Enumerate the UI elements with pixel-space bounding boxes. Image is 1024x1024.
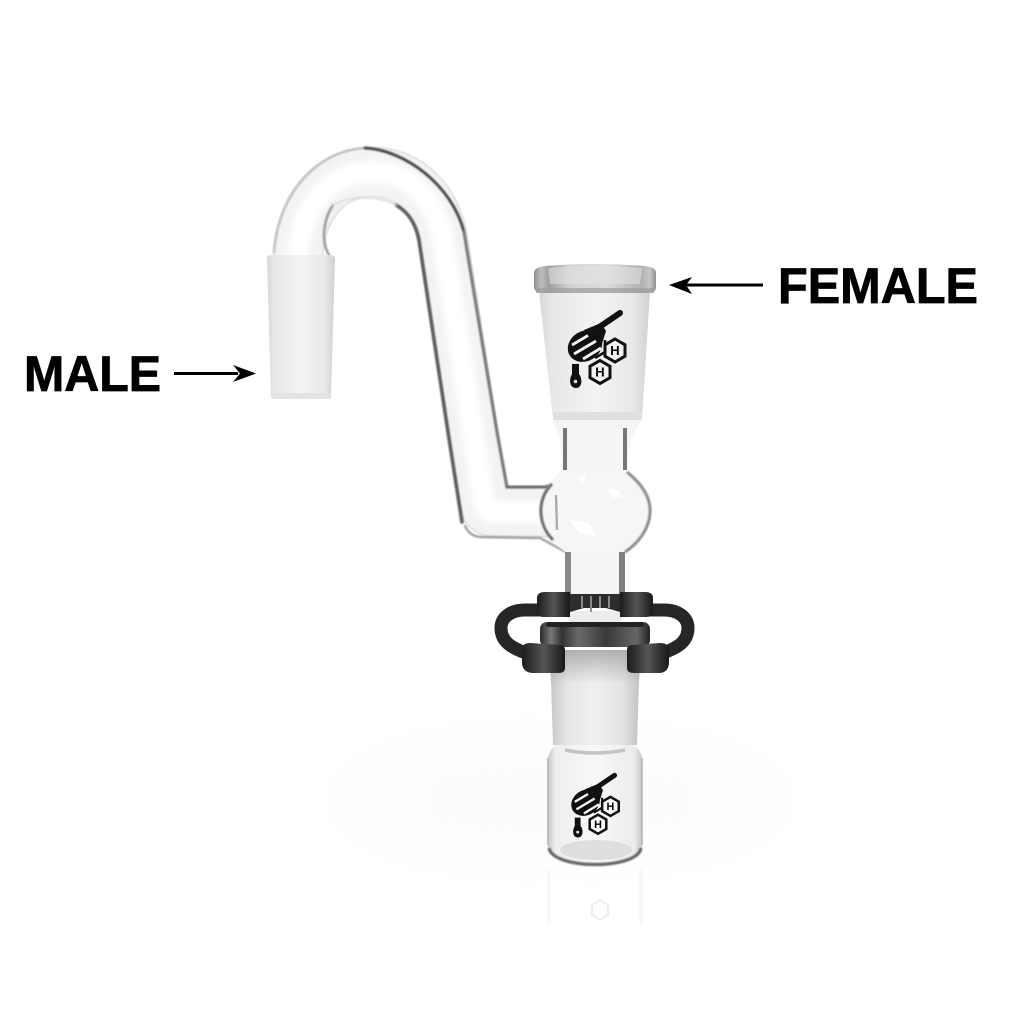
- glass seen through clip: [568, 611, 622, 623]
- logo: honey dipper on female joint: H: [610, 343, 620, 358]
- glass sphere: [540, 470, 650, 552]
- clip lower left block: [522, 643, 565, 673]
- arrow: female pointer: [669, 277, 763, 294]
- clip handles: [501, 610, 688, 653]
- floor glow: [340, 750, 780, 850]
- lower frosted joint: [550, 650, 640, 745]
- glass tube: curved S arm: [274, 148, 566, 552]
- female joint rim: [534, 264, 656, 293]
- logo: honey dipper on bottle: H: [594, 819, 602, 831]
- logo: honey dipper on female joint: [562, 313, 625, 388]
- label: FEMALE: FEMALE: [778, 257, 978, 314]
- arrow: male pointer: [174, 365, 256, 382]
- outer edge highlights: [274, 148, 365, 252]
- bottle reflection: [549, 870, 641, 925]
- clip centre bridge: [570, 594, 620, 612]
- clip ring: [540, 622, 650, 647]
- male frosted joint: [267, 255, 335, 399]
- clip lower right block: [627, 643, 669, 673]
- lower stem glass: [565, 545, 625, 600]
- female frosted joint: [539, 292, 650, 420]
- upper stem glass: [553, 420, 642, 472]
- logo: honey dipper on female joint: H: [595, 364, 605, 380]
- clip: black keck clamp: [501, 592, 688, 673]
- glass bottle: [548, 745, 642, 867]
- logo: honey dipper on bottle: H: [607, 801, 615, 813]
- clip upper left arm: [537, 592, 570, 617]
- logo: honey dipper on bottle: [566, 775, 619, 838]
- label: MALE: MALE: [24, 346, 161, 402]
- clip upper right arm: [620, 592, 653, 617]
